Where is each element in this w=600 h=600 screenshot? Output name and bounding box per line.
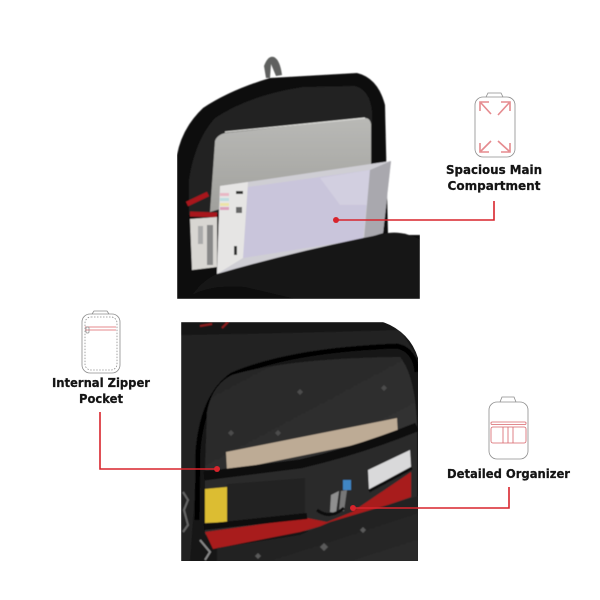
zipper edge (197, 346, 417, 520)
loop handle (264, 57, 282, 78)
front flap (190, 233, 420, 299)
document sleeve (217, 161, 391, 274)
front flap (217, 496, 418, 561)
red top zipper accents (200, 322, 228, 328)
zipper pull (200, 540, 210, 560)
icon: expanding compartment (475, 93, 515, 157)
bag shell (177, 73, 420, 299)
notepad (368, 450, 411, 490)
tan folder (226, 418, 398, 471)
arrow: main compartment connector (333, 201, 494, 223)
heading: internal zipper pocket: Internal Zipper (52, 376, 150, 390)
pens (317, 480, 351, 515)
wallet (204, 478, 307, 527)
padded inner back (189, 86, 372, 215)
white tag strip (217, 182, 248, 274)
icon: zipper pocket (82, 311, 120, 373)
arrow: organizer connector (350, 487, 509, 511)
heading: spacious main compartment: Compartment (448, 179, 541, 193)
notepad binding (369, 468, 412, 491)
red lining (205, 472, 411, 549)
laptop (210, 118, 371, 212)
photo: organizer pockets (181, 322, 419, 562)
bag shell (181, 322, 419, 562)
heading: internal zipper pocket: Pocket (79, 392, 123, 406)
logo marks on flap (255, 527, 366, 559)
red loop and care label (187, 194, 217, 270)
side buckle (183, 492, 188, 532)
icon: organizer (489, 397, 528, 459)
upper band (181, 330, 418, 561)
organizer panel (205, 425, 417, 535)
pocket strap (204, 427, 417, 476)
heading: spacious main compartment: Spacious Main (446, 163, 542, 177)
lower fold shadow (190, 286, 291, 298)
arrow: zipper pocket connector (100, 412, 220, 472)
pocket lining (205, 357, 417, 470)
heading: detailed organizer: Detailed Organizer (447, 467, 570, 481)
photo: main compartment (177, 57, 420, 299)
